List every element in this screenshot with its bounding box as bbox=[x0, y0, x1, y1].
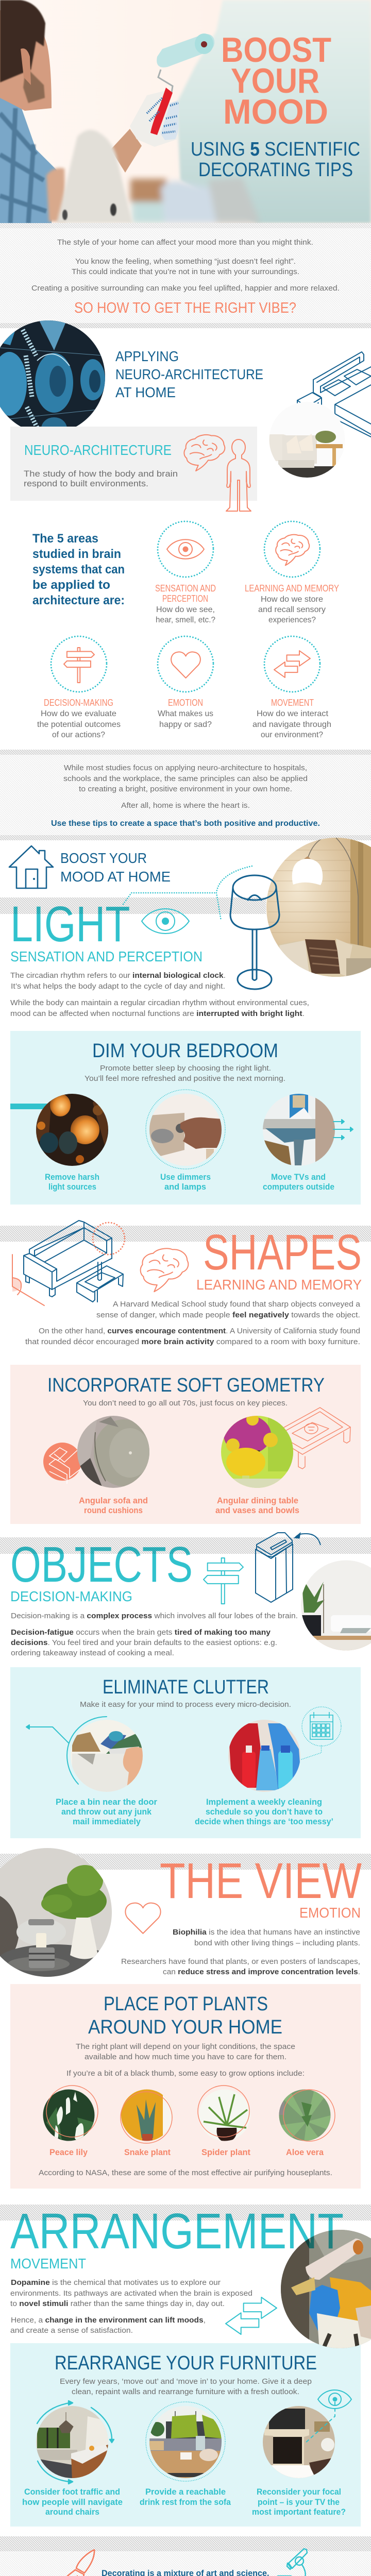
note: NASA: According to NASA, these are some of the most effective air purifying houseplants. bbox=[39, 2168, 332, 2177]
icon: arc and arrow bbox=[26, 1717, 107, 1784]
tip labels: and vases and bowls bbox=[215, 1505, 299, 1515]
subheading: emotion: EMOTION bbox=[299, 1905, 361, 1921]
text: decision-making: decisions. You feel tired and your brain defaults to the easiest options: e.g. bbox=[11, 1638, 277, 1647]
photo: cream sofa bbox=[268, 401, 346, 479]
area: sensation and perception: hear, smell, etc.? bbox=[156, 616, 215, 624]
five areas heading: studied in brain bbox=[32, 547, 121, 561]
heading: eliminate clutter: ELIMINATE CLUTTER bbox=[103, 1676, 269, 1698]
area: emotion: EMOTION bbox=[168, 698, 203, 708]
panel: place pot plants bbox=[10, 1984, 361, 2189]
tip labels: point – is your TV the bbox=[258, 2497, 340, 2507]
area: learning and memory: How do we store bbox=[261, 595, 323, 604]
icon: orange sofa badge bbox=[43, 1443, 81, 1484]
plant labels bbox=[49, 2147, 324, 2157]
text: sharp objects and curves: sense of danger, which made people feel negatively towards the object. bbox=[96, 1311, 360, 1319]
section heading: applying neuro-architecture bbox=[115, 348, 263, 400]
icon: dotted highlight circle bbox=[93, 1223, 125, 1255]
text: sharp objects and curves: A Harvard Medical School study found that sharp objects conveyed a bbox=[113, 1300, 361, 1309]
subheading: learning and memory: LEARNING AND MEMORY bbox=[196, 1277, 362, 1293]
heading: place pot plants around your home: AROUND YOUR HOME bbox=[88, 2016, 282, 2038]
area: movement bbox=[252, 636, 331, 739]
text: dopamine: Dopamine is the chemical that motivates us to explore our bbox=[11, 2278, 221, 2287]
subheading: decision-making: DECISION-MAKING bbox=[10, 1588, 132, 1604]
photo: peace lily bbox=[42, 2089, 96, 2142]
panel intro: The right plant will depend on your light conditions, the space bbox=[76, 2042, 295, 2051]
intro text: You know the feeling, when something “just doesn’t feel right”. bbox=[75, 257, 296, 266]
tip labels: Use dimmers bbox=[160, 1172, 211, 1182]
panel intro: Make it easy for your mind to process every micro-decision. bbox=[80, 1700, 291, 1709]
intro text: Creating a positive surrounding can make you feel uplifted, happier and more relaxed. bbox=[31, 284, 340, 293]
panel intro: Every few years, ‘move out’ and ‘move in’ to your home. Give it a deep bbox=[60, 2377, 312, 2386]
definition text: respond to built environments. bbox=[24, 479, 148, 488]
panel intro: You’ll feel more refreshed and positive the next morning. bbox=[85, 1074, 285, 1083]
text: circadian rhythm: It’s what helps the body adapt to the cycle of day and night. bbox=[11, 982, 225, 991]
icon: microscope bbox=[278, 2549, 307, 2576]
area: decision-making: DECISION-MAKING bbox=[44, 698, 113, 708]
tip labels: Remove harsh bbox=[45, 1172, 99, 1182]
photo: spider plant bbox=[198, 2089, 251, 2142]
icon: eye with dashed sightline bbox=[305, 2390, 351, 2444]
intro text: The style of your home can affect your mood more than you might think. bbox=[57, 238, 313, 247]
icon: rubbish bin bbox=[256, 1533, 293, 1602]
text: dopamine: environments. Its pathways are activated when the brain is exposed bbox=[10, 2289, 252, 2298]
photo: mail in letterbox bbox=[70, 1719, 145, 1795]
icon: brain bbox=[276, 535, 309, 565]
panel intro bbox=[60, 2377, 312, 2396]
text: dopamine: and create a sense of satisfaction. bbox=[10, 2326, 133, 2335]
text: circadian rhythm: mood can be affected when nocturnal functions are interrupted with bright light . bbox=[10, 1009, 305, 1018]
text: biophilia: can reduce stress and improve concentration levels . bbox=[163, 1968, 360, 1976]
icon: angle marker bbox=[12, 1255, 44, 1306]
tip labels: most important feature? bbox=[252, 2507, 346, 2517]
area: emotion bbox=[158, 636, 213, 729]
icon: curved arrow bbox=[294, 1533, 321, 1545]
text: dopamine bbox=[10, 2278, 252, 2335]
photo: green cushions and table bbox=[148, 2405, 223, 2480]
icon: swap arrows bbox=[226, 2297, 277, 2334]
tip labels: decide when things are ‘too messy’ bbox=[195, 1817, 333, 1826]
five areas heading: be applied to bbox=[32, 578, 110, 592]
text: decision-making: Decision-making is a complex process which involves all four lobes of the brain. bbox=[11, 1612, 298, 1620]
tip labels bbox=[22, 2487, 346, 2517]
tip labels: Reconsider your focal bbox=[257, 2487, 341, 2497]
text: while most studies: schools and the workplace, the same principles can also be applied bbox=[63, 774, 308, 783]
subtitle bbox=[191, 139, 360, 181]
panel intro: You don’t need to go all out 70s, just focus on key pieces. bbox=[83, 1399, 288, 1408]
photo: fireplace and TV bbox=[262, 2405, 336, 2481]
text: biophilia bbox=[121, 1928, 360, 1976]
text: biophilia: Biophilia is the idea that humans have an instinctive bbox=[173, 1928, 360, 1937]
tip labels: mail immediately bbox=[73, 1817, 141, 1826]
text: decision-making: Decision-fatigue occurs when the brain gets tired of making too many bbox=[11, 1628, 271, 1637]
tip labels bbox=[45, 1172, 334, 1192]
section heading: applying neuro-architecture: APPLYING bbox=[115, 348, 179, 364]
icon: heart bbox=[171, 652, 200, 678]
area: emotion: What makes us bbox=[158, 709, 213, 718]
area: emotion: happy or sad? bbox=[159, 720, 212, 729]
icon: outward arrows bbox=[333, 1120, 353, 1140]
tip labels: Place a bin near the door bbox=[56, 1797, 157, 1807]
tip labels: how people will navigate bbox=[22, 2497, 123, 2507]
area: learning and memory: experiences? bbox=[268, 616, 316, 624]
text: sharp objects and curves bbox=[25, 1300, 361, 1346]
area: learning and memory: and recall sensory bbox=[258, 605, 326, 614]
area: movement: and navigate through bbox=[252, 720, 331, 729]
icon: signpost bbox=[204, 1558, 243, 1604]
text: circadian rhythm: While the body can maintain a regular circadian rhythm without environmental cues, bbox=[10, 998, 309, 1007]
heading: dim your bedroom: DIM YOUR BEDROOM bbox=[92, 1040, 278, 1062]
intro text: This could indicate that you’re not in tune with your surroundings. bbox=[72, 267, 299, 276]
photo: arc floor lamp in a brick room bbox=[265, 837, 371, 979]
title: MOOD bbox=[223, 92, 328, 131]
icon: signpost bbox=[64, 648, 94, 683]
heading: neuro-architecture: NEURO-ARCHITECTURE bbox=[24, 442, 172, 458]
icon: eye bbox=[142, 909, 189, 934]
text: dopamine: Hence, a change in the environment can lift moods , bbox=[11, 2316, 206, 2325]
intro text bbox=[31, 238, 340, 293]
tip labels: Provide a reachable bbox=[145, 2487, 226, 2497]
text: while most studies: After all, home is where the heart is. bbox=[121, 801, 250, 810]
panel intro bbox=[85, 1064, 285, 1083]
hero photo: man painting wall bbox=[0, 0, 371, 223]
subtitle: USING 5 SCIENTIFIC bbox=[191, 139, 360, 160]
tip labels: and lamps bbox=[164, 1182, 206, 1192]
area: sensation and perception: How do we see, bbox=[156, 605, 215, 614]
area: decision-making: the potential outcomes bbox=[37, 720, 121, 729]
area: decision-making: of our actions? bbox=[52, 731, 105, 739]
tip labels: Consider foot traffic and bbox=[24, 2487, 120, 2497]
text: biophilia: Researchers have found that plants, or even posters of landscapes, bbox=[121, 1957, 360, 1966]
panel: incorporate soft geometry bbox=[10, 1365, 361, 1524]
photo: round cushion bbox=[77, 1416, 149, 1488]
definition text bbox=[24, 469, 178, 488]
icon: coral table line art bbox=[271, 1408, 350, 1469]
subheading: sensation and perception: SENSATION AND PERCEPTION bbox=[10, 948, 203, 964]
icon: human figure bbox=[226, 439, 251, 511]
title: YOUR bbox=[231, 61, 319, 100]
photo: cleaning bottles bbox=[227, 1719, 302, 1793]
panel intro: Promote better sleep by choosing the right light. bbox=[100, 1064, 271, 1073]
text: while most studies bbox=[51, 764, 320, 828]
panel: neuro-architecture definition bbox=[10, 427, 257, 511]
text: while most studies: Use these tips to create a space that’s both positive and productive. bbox=[51, 819, 320, 828]
tip labels: Angular sofa and bbox=[79, 1496, 148, 1505]
photo: bright living room bbox=[300, 1560, 371, 1654]
text: sharp objects and curves: On the other hand, curves encourage contentment . A University of California study found bbox=[39, 1327, 360, 1335]
subtitle: DECORATING TIPS bbox=[198, 159, 353, 181]
section heading: applying neuro-architecture: AT HOME bbox=[115, 384, 176, 400]
area: sensation and perception: PERCEPTION bbox=[162, 594, 208, 604]
section heading: applying neuro-architecture: NEURO-ARCHITECTURE bbox=[115, 366, 263, 382]
text: biophilia: bond with other living things – including plants. bbox=[194, 1939, 360, 1947]
area: decision-making bbox=[37, 636, 121, 739]
subheading: movement: MOVEMENT bbox=[10, 2256, 86, 2272]
area: movement: our environment? bbox=[261, 731, 323, 739]
photo: lantern and fern bbox=[0, 1847, 113, 1978]
definition text: The study of how the body and brain bbox=[24, 469, 178, 479]
icon: brain bbox=[141, 1248, 188, 1292]
panel intro bbox=[66, 2042, 305, 2078]
icon: house bbox=[9, 846, 53, 888]
tip labels: schedule so you don’t have to bbox=[206, 1807, 323, 1817]
tip labels bbox=[79, 1496, 299, 1515]
tip labels: Implement a weekly cleaning bbox=[206, 1797, 322, 1807]
five areas heading: The 5 areas bbox=[32, 532, 98, 546]
tip labels: computers outside bbox=[263, 1182, 334, 1192]
icon: brain bbox=[184, 435, 225, 471]
title: BOOST bbox=[221, 30, 331, 70]
panel intro: If you’re a bit of a black thumb, some easy to grow options include: bbox=[66, 2069, 305, 2078]
dotted connector bbox=[123, 866, 252, 921]
plant labels: Spider plant bbox=[201, 2147, 250, 2157]
tip labels: drink rest from the sofa bbox=[140, 2497, 231, 2507]
text: while most studies: While most studies focus on applying neuro-architecture to hospitals, bbox=[64, 764, 307, 772]
tip labels: Angular dining table bbox=[217, 1496, 298, 1505]
plant labels: Peace lily bbox=[49, 2147, 88, 2157]
tip labels bbox=[56, 1797, 333, 1826]
panel intro: available and how much time you have to care for them. bbox=[85, 2053, 286, 2061]
text: dopamine: to novel stimuli rather than the same things day in, day out. bbox=[10, 2299, 225, 2308]
photo: hand on dimmer switch bbox=[148, 1092, 223, 1167]
area: sensation and perception bbox=[155, 521, 216, 624]
heading: incorporate soft geometry: INCORPORATE SOFT GEOMETRY bbox=[47, 1375, 325, 1396]
icon: lamp line art bbox=[230, 875, 279, 989]
tip labels: Move TVs and bbox=[271, 1172, 326, 1182]
area: movement: How do we interact bbox=[257, 709, 329, 718]
tip labels: and throw out any junk bbox=[61, 1807, 152, 1817]
section title: light: LIGHT bbox=[10, 896, 130, 952]
text: decision-making: ordering takeaway instead of cooking a meal. bbox=[11, 1649, 174, 1657]
photo: vase with flowers bbox=[220, 1413, 295, 1489]
photo: snake plant bbox=[120, 2089, 174, 2142]
icon: bed line art bbox=[297, 352, 371, 437]
heading: boost your mood at home: MOOD AT HOME bbox=[60, 869, 171, 885]
icon: swap arrows bbox=[274, 651, 310, 677]
heading: rearrange your furniture: REARRANGE YOUR FURNITURE bbox=[55, 2352, 317, 2374]
title bbox=[221, 30, 331, 131]
text: while most studies: to creating a bright, positive environment in your own home. bbox=[79, 785, 292, 793]
five areas heading: systems that can bbox=[32, 563, 125, 577]
text: circadian rhythm: The circadian rhythm refers to our internal biological clock . bbox=[10, 971, 226, 980]
plant labels: Snake plant bbox=[124, 2147, 171, 2157]
tip labels: around chairs bbox=[45, 2507, 99, 2517]
heading: boost your mood at home: BOOST YOUR bbox=[60, 850, 147, 866]
area: decision-making: How do we evaluate bbox=[41, 709, 116, 718]
icon: eye bbox=[167, 539, 204, 559]
panel: dim your bedroom bbox=[10, 1031, 361, 1205]
photo: bedroom with desk bbox=[262, 1092, 336, 1167]
heading: place pot plants around your home: PLACE POT PLANTS bbox=[104, 1993, 268, 2015]
text: circadian rhythm bbox=[10, 971, 309, 1018]
tip labels: round cushions bbox=[84, 1505, 143, 1515]
icon: paint brush bbox=[64, 2550, 94, 2576]
section title: objects: OBJECTS bbox=[10, 1536, 193, 1592]
panel intro: clean, repaint walls and rearrange furniture with a fresh outlook. bbox=[72, 2387, 299, 2396]
area: movement: MOVEMENT bbox=[271, 698, 314, 708]
plant labels: Aloe vera bbox=[286, 2147, 324, 2157]
tip labels: light sources bbox=[48, 1182, 96, 1192]
heading: place pot plants around your home bbox=[88, 1993, 282, 2038]
photo: aloe vera bbox=[278, 2089, 332, 2142]
heading: boost your mood at home bbox=[60, 850, 171, 885]
photo: light bulbs bbox=[35, 1092, 110, 1167]
icon: sofa line art bbox=[24, 1221, 123, 1302]
icon: calendar in dotted circle bbox=[301, 1707, 341, 1759]
five areas heading bbox=[32, 532, 125, 607]
photo: brain scans bbox=[0, 320, 105, 427]
text: sharp objects and curves: that rounded décor encouraged more brain activity compared to a room with boxy furniture. bbox=[25, 1337, 360, 1346]
five areas heading: architecture are: bbox=[32, 594, 125, 607]
panel: rearrange your furniture bbox=[10, 2343, 361, 2527]
icon: circular arrows bbox=[37, 2401, 114, 2484]
area: sensation and perception: SENSATION AND bbox=[155, 583, 216, 594]
question heading: SO HOW TO GET THE RIGHT VIBE? bbox=[74, 300, 296, 316]
text: decision-making bbox=[11, 1612, 298, 1657]
area: learning and memory bbox=[245, 521, 339, 624]
icon: heart bbox=[125, 1903, 161, 1934]
photo: painting tools on stool bbox=[278, 2228, 371, 2352]
panel: eliminate clutter bbox=[10, 1667, 361, 1838]
area: learning and memory: LEARNING AND MEMORY bbox=[245, 583, 339, 594]
photo: open kitchen bbox=[35, 2405, 110, 2481]
